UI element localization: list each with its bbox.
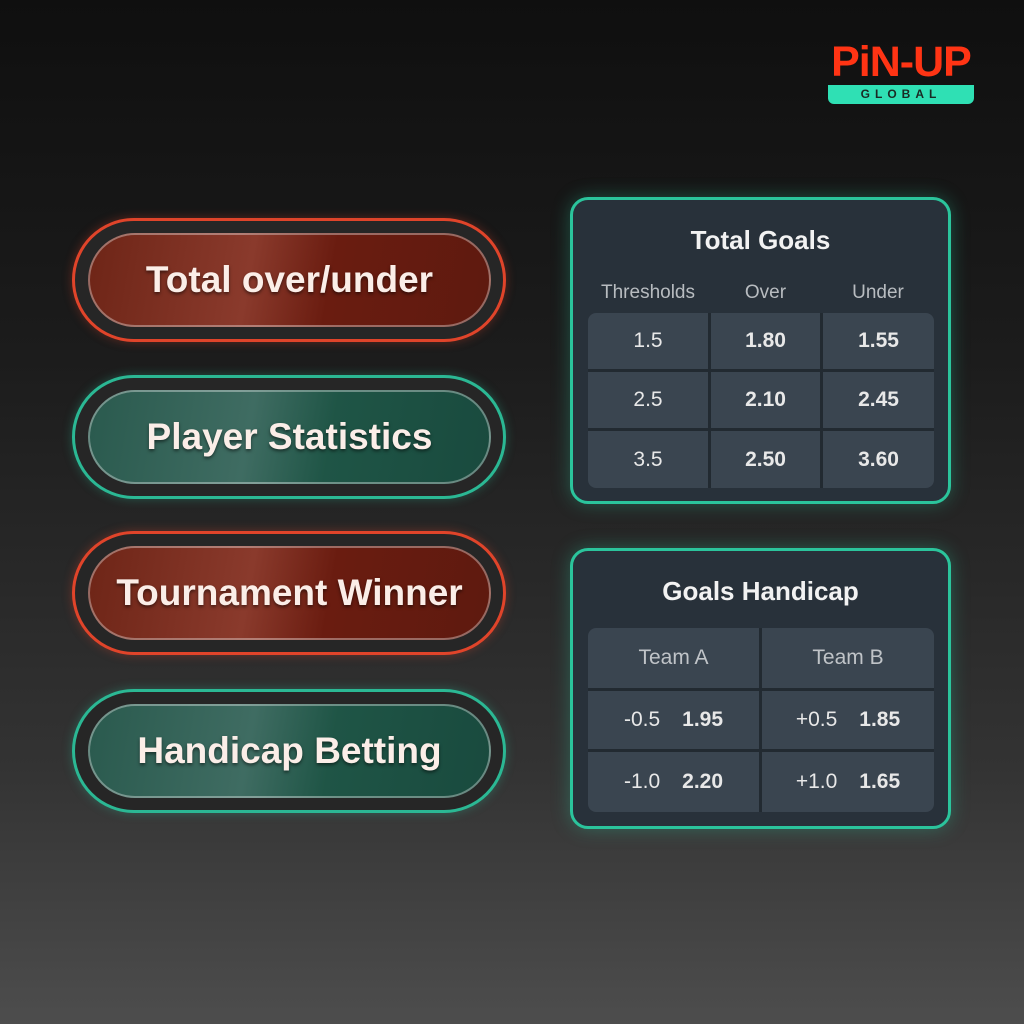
panel: Total Goals: Under bbox=[852, 282, 904, 303]
panel: Total Goals: 2.50 bbox=[745, 448, 786, 470]
button: Player Statistics: Player Statistics bbox=[147, 416, 432, 457]
button: Handicap Betting bbox=[72, 689, 506, 813]
panel: Total Goals: 3.60 bbox=[858, 448, 899, 470]
logo: GLOBAL bbox=[861, 87, 941, 101]
panel: Total Goals: 1.80 bbox=[745, 329, 786, 352]
button: Player Statistics bbox=[72, 375, 506, 499]
panel: Total Goals: 2.45 bbox=[858, 388, 899, 411]
button: Total over/under bbox=[72, 218, 506, 342]
panel: Goals Handicap: +1.0 bbox=[796, 770, 837, 793]
panel: Total Goals: 1.5 bbox=[633, 329, 663, 352]
button: Tournament Winner bbox=[72, 531, 506, 655]
panel: Total Goals: Over bbox=[745, 282, 786, 303]
panel: Goals Handicap: -1.0 bbox=[624, 770, 660, 793]
panel: Goals Handicap: 1.85 bbox=[859, 708, 900, 731]
panel: Total Goals: Total Goals bbox=[691, 225, 830, 255]
panel: Goals Handicap: Team A bbox=[638, 646, 709, 669]
logo bbox=[828, 38, 974, 104]
panel: Total Goals bbox=[570, 197, 951, 504]
panel: Total Goals: Thresholds bbox=[601, 282, 695, 303]
panel: Goals Handicap: 1.95 bbox=[682, 708, 723, 731]
panel: Total Goals: 2.10 bbox=[745, 388, 786, 411]
panel: Total Goals: 1.55 bbox=[858, 329, 899, 352]
logo: PiN-UP bbox=[831, 38, 971, 86]
panel: Goals Handicap: +0.5 bbox=[796, 708, 837, 731]
panel: Goals Handicap: 2.20 bbox=[682, 770, 723, 793]
panel: Goals Handicap bbox=[570, 548, 951, 829]
panel: Goals Handicap: Team B bbox=[812, 646, 884, 669]
panel: Goals Handicap: -0.5 bbox=[624, 708, 660, 731]
button: Tournament Winner: Tournament Winner bbox=[116, 572, 463, 613]
button: Handicap Betting: Handicap Betting bbox=[137, 730, 442, 771]
button: Total over/under: Total over/under bbox=[146, 259, 433, 300]
panel: Goals Handicap: 1.65 bbox=[859, 770, 900, 793]
panel: Total Goals: 2.5 bbox=[633, 388, 663, 411]
panel: Total Goals: 3.5 bbox=[633, 448, 663, 470]
panel: Goals Handicap: Goals Handicap bbox=[662, 576, 859, 606]
